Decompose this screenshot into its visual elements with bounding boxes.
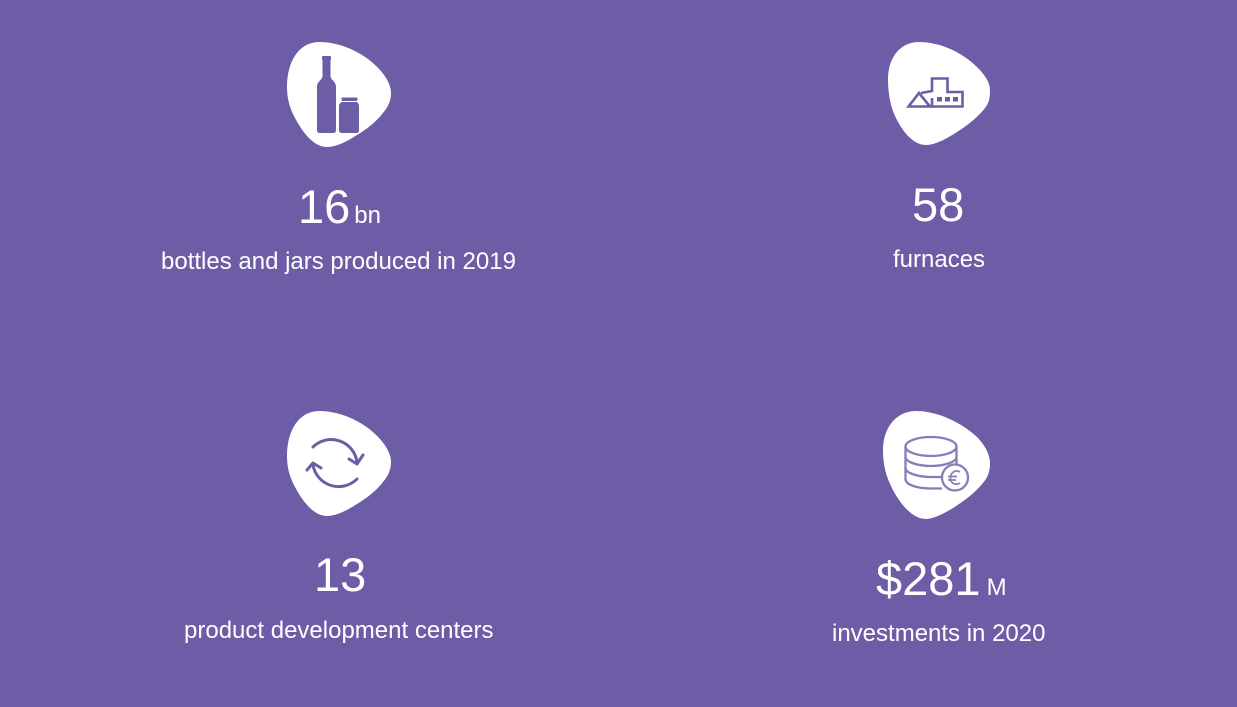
icon: coin stack with euro (883, 411, 990, 519)
icon: furnace factory (888, 42, 990, 145)
stat card: furnaces (888, 42, 990, 273)
stat card: product development centers (184, 411, 494, 644)
value: 58: 58 (912, 178, 964, 231)
value: 13: 13 (314, 548, 366, 601)
label: investments in 2020: investments in 2020 (832, 620, 1045, 647)
stat card: bottles and jars (161, 42, 516, 275)
icon: circular arrows (287, 411, 391, 516)
label: furnaces: furnaces (893, 246, 985, 273)
value: $281 M: $281M (876, 552, 1007, 605)
label: bottles and jars produced in 2019: bottles and jars produced in 2019 (161, 248, 516, 275)
value: 16 bn: 16bn (298, 180, 381, 233)
stat card: investments (832, 411, 1045, 647)
label: product development centers: product development centers (184, 617, 494, 644)
icon: bottle and jar (287, 42, 391, 147)
